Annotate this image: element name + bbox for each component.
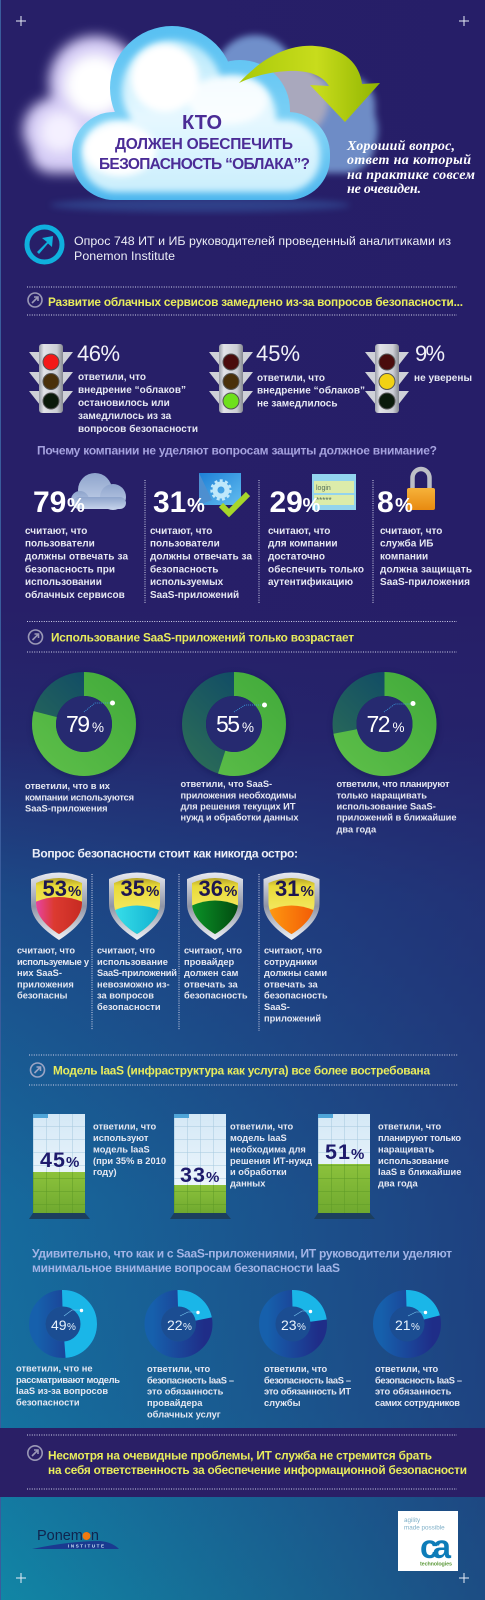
shield 35%: невозможно из- <box>97 980 170 990</box>
bar 51%: IaaS в ближайшие <box>378 1167 461 1177</box>
stat 8% with lock icon: 8 <box>377 486 394 519</box>
handwritten note: Хороший вопрос, <box>346 139 455 154</box>
bar 51%: два года <box>378 1178 418 1188</box>
donut 72%: только наращивать <box>336 790 427 800</box>
shield 31%: SaaS- <box>264 1002 290 1012</box>
donut 55%: % <box>242 720 254 735</box>
back cloud left <box>23 36 141 173</box>
stat 29% with login icon: % <box>302 495 320 517</box>
donut 72% <box>334 674 456 834</box>
small donut 23%: 23 <box>281 1317 297 1333</box>
conclusion band <box>0 1428 485 1497</box>
stat 29% with login icon: для компании <box>268 538 338 550</box>
handwritten note: на практике совсем <box>347 168 475 183</box>
subheading: surprising: Удивительно, что как и с SaaS-приложениями, ИТ руководители уделяют <box>32 1246 452 1260</box>
bar 45%: ответили, что <box>93 1122 157 1132</box>
logo: Ponemon: INSTITUTE <box>68 1544 104 1548</box>
donut 72%: два года <box>336 824 377 834</box>
shield 53%: считают, что <box>17 946 75 956</box>
subheading: why companies: Почему компании не уделяют вопросам защиты должное внимание? <box>37 444 437 458</box>
shield 31%: должны сами <box>264 968 327 978</box>
title: БЕЗОПАСНОСТЬ “ОБЛАКА”? <box>99 156 310 173</box>
survey intro text: Опрос 748 ИТ и ИБ руководителей проведенный аналитиками из <box>74 234 451 248</box>
donut 79%: 79 <box>66 711 90 737</box>
stat 31% with settings icon: SaaS-приложений <box>150 590 239 601</box>
bar 33%: данных <box>230 1178 266 1188</box>
shield 36%: провайдер <box>184 957 235 967</box>
bar 45%: используют <box>93 1133 149 1143</box>
survey intro text: Ponemon Institute <box>74 249 175 263</box>
stat 79% with cloud icon: облачных сервисов <box>25 589 125 601</box>
stat 29% with login icon: аутентификацию <box>268 576 353 588</box>
shield 35%: считают, что <box>97 946 155 956</box>
traffic light stat 9%: не уверены <box>414 373 472 384</box>
logo: Ponemon: Ponemon <box>37 1528 99 1544</box>
donut 79%: % <box>92 720 104 735</box>
donut 55%: нужд и обработки данных <box>180 812 299 822</box>
donut 72%: % <box>392 720 405 735</box>
small donut 22%: это обязанность <box>147 1386 224 1396</box>
shield 35%: использование <box>97 957 168 967</box>
small donut 21%: % <box>411 1322 420 1333</box>
traffic light stat 45%: внедрение “облаков” <box>257 384 365 396</box>
logo: CA Technologies <box>398 1511 458 1571</box>
bar 33%: ответили, что <box>230 1122 294 1132</box>
shield 31%: % <box>300 883 314 900</box>
shield 31%: считают, что <box>264 946 322 956</box>
shield 35%: 35 <box>120 876 145 901</box>
shield 31%: приложений <box>264 1014 321 1024</box>
stat 31% with settings icon: считают, что <box>150 526 212 537</box>
subheading: surprising <box>32 1246 452 1275</box>
donut 79% <box>25 674 137 814</box>
icon: gear screen <box>199 473 248 513</box>
traffic light stat 46%: ответили, что <box>78 372 146 383</box>
donut 72%: ответили, что планируют <box>336 779 450 789</box>
icon: login form: ***** <box>316 496 332 505</box>
traffic light stat 45%: 45% <box>256 341 300 366</box>
icon: padlock <box>407 469 435 510</box>
title: КТО <box>182 112 222 134</box>
shield 31% <box>264 872 328 1024</box>
handwritten note: не очевиден. <box>347 182 421 197</box>
stat 79% with cloud icon: 79 <box>33 486 66 519</box>
shield 53%: них SaaS- <box>17 968 62 978</box>
title: ДОЛЖЕН ОБЕСПЕЧИТЬ <box>115 136 293 153</box>
title <box>99 112 310 173</box>
stat 29% with login icon: достаточно <box>268 552 325 562</box>
icon: login form <box>312 474 356 510</box>
shield 36%: отвечать за <box>184 980 238 990</box>
donut 72%: приложений в ближайшие <box>336 812 456 822</box>
traffic light stat 46% <box>29 341 198 435</box>
small donut 49%: безопасности <box>16 1398 80 1408</box>
small donut 21%: это обязанность <box>375 1386 452 1396</box>
small donut 49%: IaaS из-за вопросов <box>16 1386 108 1396</box>
bar 33%: решения ИТ-нужд <box>230 1156 312 1166</box>
hero: cloud illustration <box>23 26 378 212</box>
donut 79%: SaaS-приложения <box>25 804 108 814</box>
shield 53%: 53 <box>42 876 67 901</box>
back cloud right <box>215 35 378 173</box>
shield 36%: безопасность <box>184 990 248 1000</box>
small donut 21%: 21 <box>395 1317 411 1333</box>
section heading 1: Развитие облачных сервисов замедлено из-за вопросов безопасности... <box>48 295 463 309</box>
stat 29% with login icon: считают, что <box>268 526 330 537</box>
section heading 2: Использование SaaS-приложений только возрастает <box>51 630 354 644</box>
logo: Ponemon <box>32 1528 119 1549</box>
traffic light stat 46%: 46% <box>77 341 120 366</box>
bar 45%: году) <box>93 1167 117 1177</box>
small donut 21%: ответили, что <box>375 1364 439 1374</box>
traffic light stat 46%: вопросов безопасности <box>78 423 198 435</box>
stat 8% with lock icon: должна защищать <box>380 564 472 576</box>
section heading 3 <box>29 1055 458 1085</box>
bar 51%: использование <box>378 1156 449 1166</box>
bar 51% <box>314 1114 461 1219</box>
handwritten note <box>346 139 475 197</box>
shield 31%: отвечать за <box>264 980 318 990</box>
small donut 22%: безопасность IaaS – <box>147 1376 234 1386</box>
shield 53%: % <box>68 883 81 900</box>
logo: CA Technologies: made possible <box>404 1524 445 1532</box>
small donut 22%: провайдера <box>147 1398 203 1408</box>
section heading 2 <box>27 622 457 652</box>
stat 31% with settings icon: % <box>187 495 205 517</box>
shield 31%: 31 <box>275 876 299 901</box>
shield 35%: % <box>146 883 159 900</box>
bar 51%: % <box>351 1146 364 1163</box>
cloud glow <box>50 198 350 212</box>
arrow <box>239 46 380 122</box>
conclusion band: Несмотря на очевидные проблемы, ИТ служба не стремится брать <box>48 1448 432 1462</box>
small donut 22%: 22 <box>167 1317 183 1333</box>
bar 45%: 45 <box>40 1148 65 1172</box>
stat 8% with lock icon: SaaS-приложения <box>380 577 470 588</box>
stat 79% with cloud icon: пользователи <box>25 538 95 550</box>
small donut 21%: самих сотрудников <box>375 1398 460 1408</box>
stat 29% with login icon: 29 <box>270 486 303 519</box>
small donut 21% <box>375 1298 462 1408</box>
section heading 1 <box>27 287 463 315</box>
bar 51%: планируют только <box>378 1133 461 1143</box>
bar 33%: 33 <box>180 1163 205 1187</box>
shield 35%: SaaS-приложений <box>97 968 177 978</box>
shield 31%: сотрудники <box>264 957 318 967</box>
donut 55%: 55 <box>216 711 240 737</box>
shield 53% <box>17 872 90 1000</box>
stat 31% with settings icon <box>150 473 252 601</box>
shield 53%: безопасны <box>17 990 68 1000</box>
shield 31%: безопасность <box>264 990 328 1000</box>
stat 8% with lock icon: компании <box>380 552 428 562</box>
stat 31% with settings icon: должны отвечать за <box>150 552 252 562</box>
shield 35% <box>97 872 177 1012</box>
logo: CA Technologies: agility <box>404 1517 421 1524</box>
small donut 21%: безопасность IaaS – <box>375 1376 462 1386</box>
shield 36%: 36 <box>198 876 223 901</box>
bar 45%: (при 35% в 2010 <box>93 1156 166 1166</box>
shield 53%: используемые у <box>17 957 90 967</box>
small donut 49%: рассматривают модель <box>16 1375 120 1385</box>
small donut 22%: % <box>183 1322 192 1333</box>
traffic light stat 45% <box>209 341 365 413</box>
bar 33%: модель IaaS <box>230 1133 287 1143</box>
stat 8% with lock icon <box>377 469 472 588</box>
stat 79% with cloud icon: безопасность при <box>25 564 115 576</box>
conclusion band: на себя ответственность за обеспечение информационной безопасности <box>48 1463 467 1477</box>
donut 55%: для решения текущих ИТ <box>180 802 296 812</box>
bar 45%: % <box>66 1154 79 1171</box>
small donut 23%: службы <box>264 1398 301 1408</box>
section heading 3: Модель IaaS (инфраструктура как услуга) все более востребована <box>53 1064 430 1078</box>
bar 33%: % <box>206 1169 219 1186</box>
bar 45%: модель IaaS <box>93 1144 150 1154</box>
shield 36%: считают, что <box>184 946 242 956</box>
subheading: surprising: минимальное внимание вопросам безопасности IaaS <box>32 1261 340 1275</box>
small donut 23% <box>264 1298 351 1408</box>
stat 79% with cloud icon: использовании <box>25 577 102 588</box>
stat 29% with login icon <box>268 474 364 588</box>
icon: login form: login <box>316 485 331 492</box>
subheading: security: Вопрос безопасности стоит как никогда остро: <box>32 846 298 860</box>
bar 33%: и обработки <box>230 1167 287 1177</box>
small donut 23%: ответили, что <box>264 1364 328 1374</box>
handwritten note: ответ на который <box>347 153 471 168</box>
donut 79%: компании используются <box>25 792 134 802</box>
small donut 49%: ответили, что не <box>16 1364 93 1374</box>
shield 35%: за вопросов <box>97 990 154 1000</box>
stat 8% with lock icon: считают, что <box>380 526 442 537</box>
traffic light stat 46%: замедлилось из за <box>78 411 172 422</box>
bar 33% <box>170 1114 312 1219</box>
stat 29% with login icon: обеспечить только <box>268 564 364 576</box>
traffic light stat 45%: ответили, что <box>257 373 325 384</box>
shield 36% <box>184 872 248 1000</box>
shield 53%: приложения <box>17 980 74 990</box>
traffic light stat 9% <box>365 341 472 413</box>
donut 72%: использование SaaS- <box>336 802 436 812</box>
stat 79% with cloud icon: % <box>67 495 85 517</box>
bar 51%: ответили, что <box>378 1122 442 1132</box>
shield column dividers <box>92 874 259 1031</box>
column dividers <box>145 480 373 603</box>
small donut 49%: % <box>67 1322 76 1333</box>
small donut 23%: безопасность IaaS – <box>264 1376 351 1386</box>
stat 79% with cloud icon: считают, что <box>25 526 87 537</box>
small donut 22%: ответили, что <box>147 1364 211 1374</box>
small donut 23%: % <box>297 1322 306 1333</box>
stat 31% with settings icon: безопасность <box>150 564 218 576</box>
stat 31% with settings icon: пользователи <box>150 538 220 550</box>
shield 36%: % <box>224 883 237 900</box>
donut 79%: ответили, что в их <box>25 781 111 791</box>
stat 31% with settings icon: 31 <box>153 486 186 519</box>
survey intro text <box>74 234 451 263</box>
stat 8% with lock icon: служба ИБ <box>380 538 433 550</box>
small donut 23%: это обязанность ИТ <box>264 1386 351 1396</box>
donut 55%: ответили, что SaaS- <box>180 779 272 789</box>
logo: CA Technologies: ca <box>420 1528 452 1565</box>
small donut 49% <box>16 1298 120 1408</box>
logo: CA Technologies: technologies <box>420 1562 452 1568</box>
bar 45% <box>29 1114 166 1219</box>
traffic light stat 45%: не замедлилось <box>257 398 338 410</box>
donut 55% <box>180 674 299 822</box>
donut 55%: приложения необходимы <box>180 790 297 800</box>
icon: survey arrow <box>27 227 62 262</box>
small donut 22%: облачных услуг <box>147 1410 221 1420</box>
icon: cloud <box>71 473 126 510</box>
traffic light stat 9%: 9% <box>415 341 445 366</box>
donut 72%: 72 <box>366 711 390 737</box>
stat 31% with settings icon: используемых <box>150 577 224 588</box>
traffic light stat 46%: внедрение “облаков” <box>78 384 186 396</box>
stat 79% with cloud icon <box>25 473 128 601</box>
stat 79% with cloud icon: должны отвечать за <box>25 552 128 562</box>
shield 35%: безопасности <box>97 1002 161 1012</box>
bar 51%: наращивать <box>378 1144 435 1154</box>
bar 51%: 51 <box>325 1140 350 1164</box>
small donut 49%: 49 <box>51 1317 67 1333</box>
main cloud <box>72 26 330 200</box>
bar 33%: необходима для <box>230 1144 306 1154</box>
stat 8% with lock icon: % <box>395 495 413 517</box>
shield 36%: должен сам <box>184 968 239 978</box>
small donut 22% <box>147 1298 234 1420</box>
traffic light stat 46%: остановилось или <box>78 398 170 409</box>
